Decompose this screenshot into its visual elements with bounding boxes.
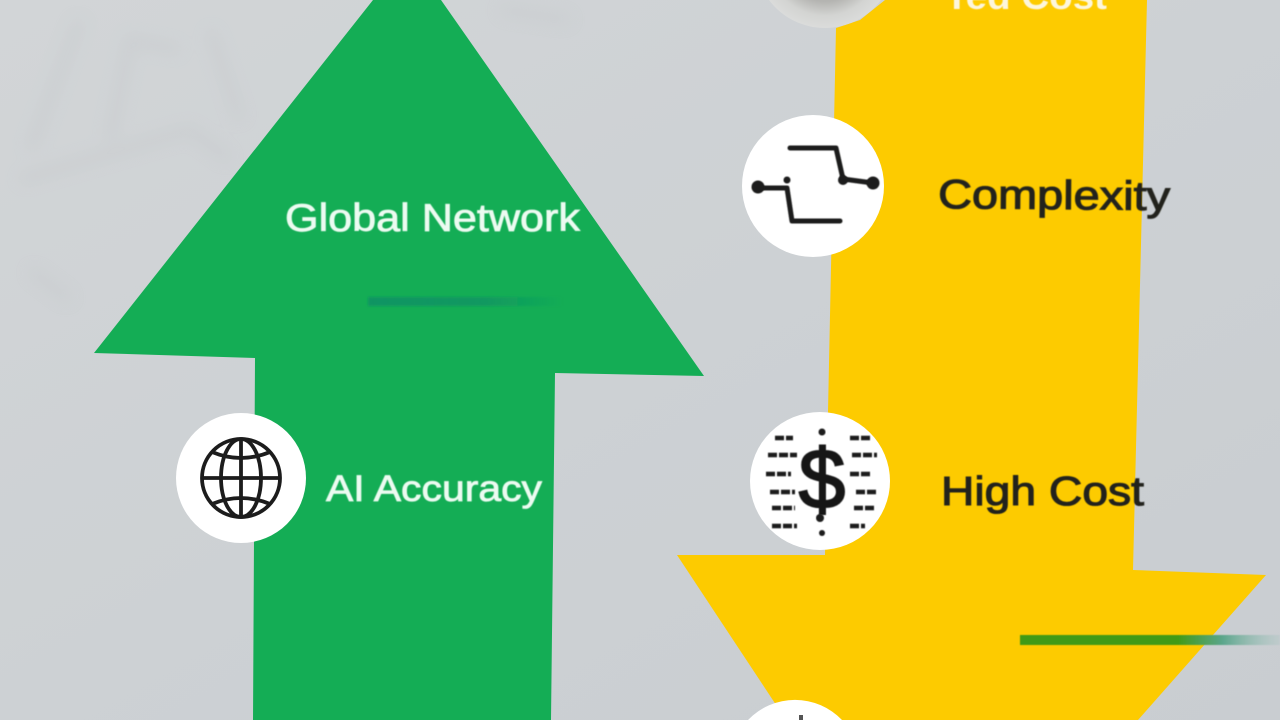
label: Complexity: Complexity <box>938 171 1171 219</box>
icon: cropped top circle <box>769 0 881 28</box>
icon: dollar with data marks <box>750 412 890 550</box>
label: High Cost: High Cost <box>941 468 1145 514</box>
yellow arrow accent line <box>1020 635 1280 645</box>
label: Global Network: Global Network <box>285 197 581 240</box>
down arrow: yellow <box>677 0 1266 720</box>
icon: globe <box>176 413 306 543</box>
icon: complexity circuit <box>742 115 884 257</box>
label: AI Accuracy: AI Accuracy <box>326 468 543 509</box>
dollar sign: $ <box>799 432 845 526</box>
icon: cropped bottom circle <box>748 700 842 720</box>
up arrow: green <box>94 0 704 720</box>
arrow accent line <box>368 297 563 306</box>
